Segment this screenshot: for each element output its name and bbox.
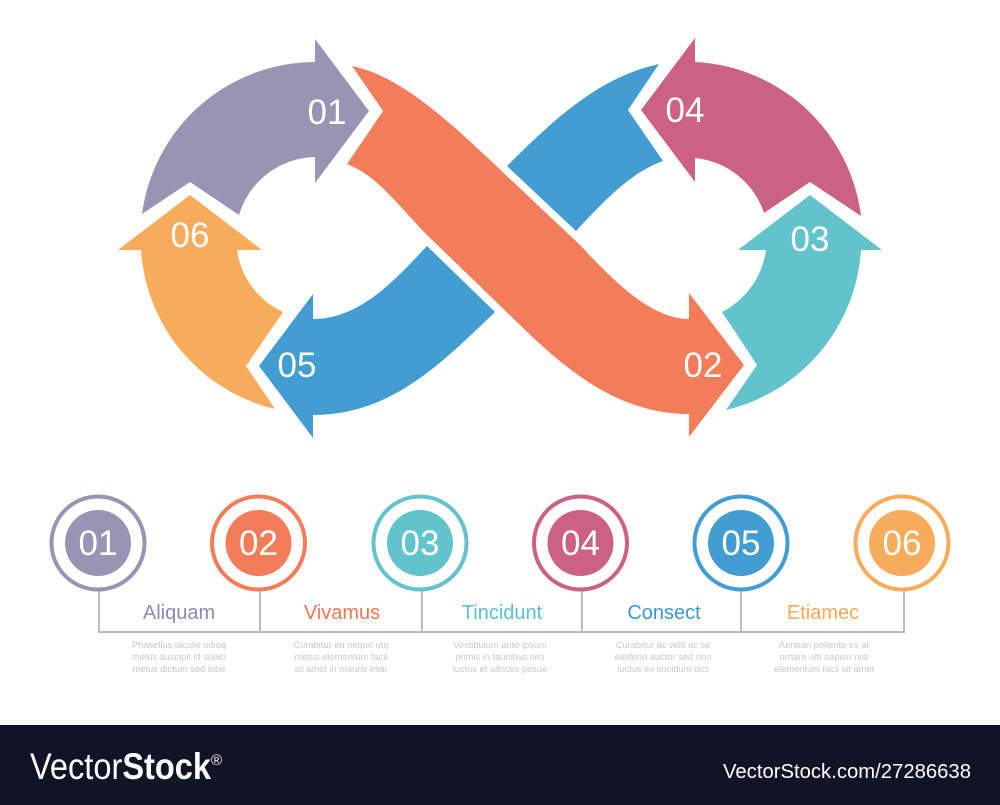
column: Etiamec: Etiamec bbox=[787, 602, 859, 624]
arrow 01: 01 bbox=[308, 93, 346, 132]
arrow 05 bbox=[259, 246, 495, 438]
column: Consect: luctus ex tincidunt dict bbox=[618, 664, 709, 674]
column: Tincidunt: Vestibulum ante ipsum bbox=[453, 640, 547, 650]
arrow 06 bbox=[118, 195, 283, 409]
column: Consect: eleifend auctor sed non bbox=[615, 652, 711, 662]
circle 02 bbox=[212, 496, 305, 590]
circle 06 bbox=[856, 496, 948, 590]
circle 05: 05 bbox=[722, 524, 760, 563]
logo: VectorStock bbox=[30, 746, 211, 787]
circle 04 bbox=[534, 496, 627, 590]
arrow 01 bbox=[142, 39, 369, 215]
column: Aliquam: metus suscipit id sollici bbox=[132, 652, 226, 662]
arrow 02 bbox=[347, 66, 744, 437]
image id: VectorStock.com/27286638 bbox=[723, 761, 971, 783]
upper blue band bbox=[507, 64, 663, 231]
column: Tincidunt: primis in faucibus orci bbox=[455, 652, 545, 662]
column: Vivamus: Vivamus bbox=[304, 602, 380, 624]
column: Aliquam: Aliquam bbox=[143, 602, 215, 624]
timeline connector lines bbox=[99, 590, 904, 632]
circle 02: 02 bbox=[239, 524, 278, 563]
column: Aliquam bbox=[132, 602, 226, 674]
column: Etiamec: Aenean pellente ex at bbox=[779, 640, 869, 650]
column: Tincidunt: luctus et ultrices posue bbox=[453, 664, 547, 674]
circle 03: 03 bbox=[401, 524, 439, 563]
column: Consect: Curabitur ac velit ac se bbox=[616, 640, 710, 650]
column: Tincidunt bbox=[453, 602, 547, 674]
column: Consect: Consect bbox=[627, 602, 701, 624]
column: Vivamus: metus elementum facil bbox=[294, 652, 388, 662]
circle 01: 01 bbox=[79, 524, 117, 563]
arrow 03: 03 bbox=[791, 220, 829, 259]
registered mark: ® bbox=[211, 752, 222, 769]
circle 05 bbox=[694, 496, 788, 590]
column: Etiamec: ornare ultr sapien nisi bbox=[780, 652, 868, 662]
column: Vivamus: sit amet in mauris etiar bbox=[294, 664, 388, 674]
column: Consect bbox=[615, 602, 711, 674]
arrow 02: 02 bbox=[684, 346, 722, 385]
arrow 04 bbox=[641, 38, 861, 216]
circle 03 bbox=[374, 496, 466, 590]
circle 01 bbox=[52, 496, 144, 590]
arrow 05: 05 bbox=[278, 346, 316, 385]
column: Vivamus bbox=[293, 602, 389, 674]
infinity diagram bbox=[118, 38, 882, 438]
circle 06: 06 bbox=[883, 524, 921, 563]
circle 04: 04 bbox=[561, 524, 600, 563]
column: Vivamus: Curabitur eu neque uto bbox=[293, 640, 389, 650]
column: Etiamec: elementum facil sit amet bbox=[774, 664, 875, 674]
arrow 06: 06 bbox=[171, 216, 209, 255]
arrow 03 bbox=[722, 195, 882, 410]
column: Aliquam: metus dictum sed bibe bbox=[132, 664, 226, 674]
column: Aliquam: Phasellus iaculis odioq bbox=[132, 640, 226, 650]
arrow 04: 04 bbox=[666, 91, 704, 130]
column: Tincidunt: Tincidunt bbox=[462, 602, 543, 624]
step circles bbox=[52, 496, 948, 590]
footer bar bbox=[0, 725, 1000, 805]
column: Etiamec bbox=[774, 602, 875, 674]
